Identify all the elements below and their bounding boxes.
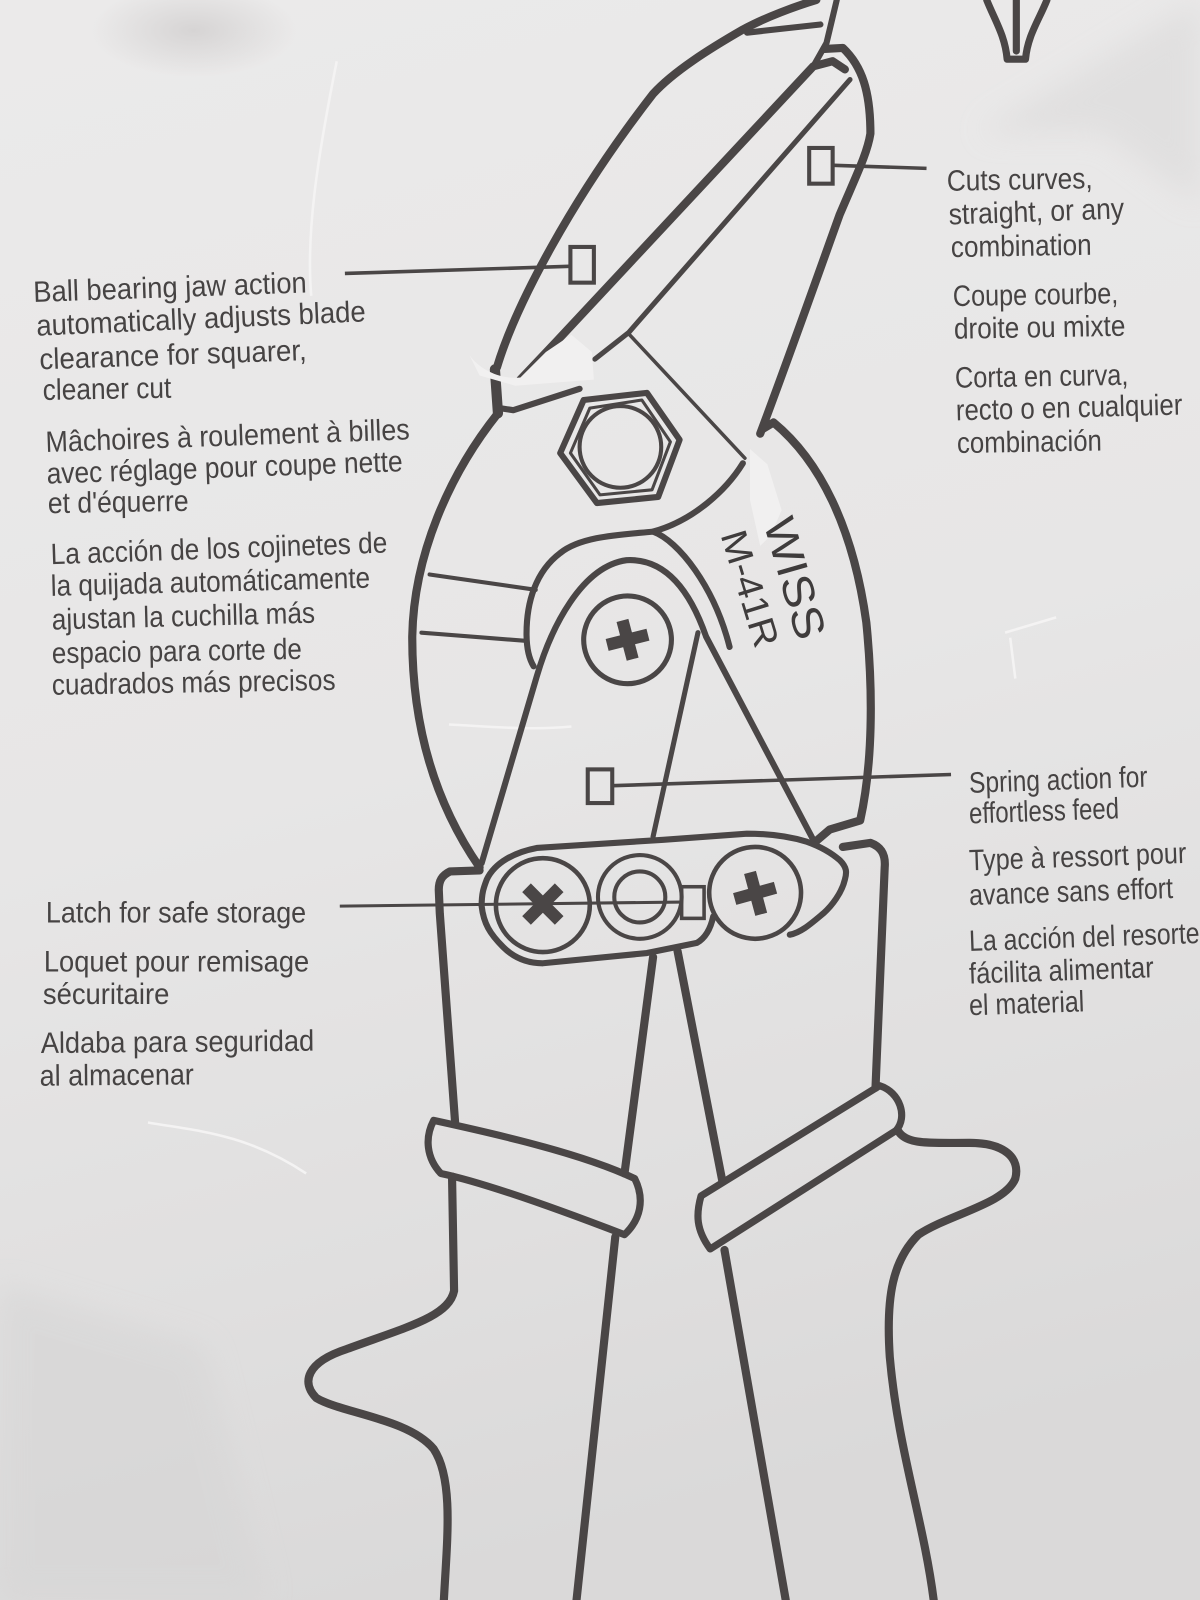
- head right outline: [763, 422, 871, 842]
- text block: English: automatically adjusts blade: [36, 295, 366, 343]
- head ribs: [421, 574, 536, 641]
- text block: Spanish: [955, 359, 1183, 460]
- right handle band: [698, 1086, 902, 1249]
- text block: French: [45, 413, 410, 520]
- inner right handle: [678, 951, 786, 1600]
- latch rivet: [598, 855, 682, 939]
- text block: English: [946, 162, 1125, 264]
- leader line and marker: [340, 887, 704, 918]
- pivot curve: [527, 463, 743, 666]
- left handle band: [428, 1120, 640, 1235]
- model label: [713, 512, 835, 652]
- text block: French: Mâchoires à roulement à billes: [45, 413, 410, 459]
- text block: Spanish: [50, 527, 388, 702]
- blade heel line: [629, 334, 745, 458]
- text block: Spanish: la quijada automáticamente: [50, 562, 370, 603]
- text block: English: [33, 267, 366, 407]
- text block: Spanish: [40, 1025, 314, 1093]
- latch plate: [482, 834, 846, 963]
- jaw heel: [500, 389, 580, 410]
- leader line and marker: [809, 148, 927, 184]
- text block: Spanish: el material: [968, 985, 1085, 1022]
- text block: Spanish: al almacenar: [40, 1058, 194, 1093]
- text block: French: [953, 277, 1126, 346]
- callout: cuts curves: [809, 148, 1183, 460]
- blade inner lines: [520, 61, 845, 380]
- head left outline: [412, 413, 498, 867]
- text block: English: Ball bearing jaw action: [33, 267, 307, 309]
- text block: Spanish: fácilita alimentar: [968, 951, 1154, 991]
- text block: English: combination: [951, 229, 1092, 264]
- callout: latch: [40, 887, 704, 1093]
- latch screw right: [709, 847, 801, 939]
- text block: Spanish: combinación: [957, 425, 1102, 460]
- upper jaw outer blade: [497, 0, 816, 367]
- text block: French: Loquet pour remisage: [44, 945, 309, 978]
- right handle grip: [889, 1131, 1016, 1600]
- text block: English: effortless feed: [968, 792, 1120, 830]
- text block: English: clearance for squarer,: [39, 334, 307, 376]
- text block: French: [43, 945, 309, 1011]
- model label: WISS: [754, 512, 835, 645]
- text block: Spanish: ajustan la cuchilla más: [51, 597, 315, 637]
- text block: French: droite ou mixte: [954, 310, 1126, 346]
- right handle upper: [843, 843, 885, 1088]
- leader line and marker: [345, 247, 594, 283]
- text block: French: Coupe courbe,: [953, 277, 1118, 313]
- callout: ball bearing jaw action: [33, 247, 594, 702]
- text block: French: sécuritaire: [43, 978, 169, 1011]
- latch screw left: [496, 858, 590, 952]
- text block: Spanish: cuadrados más precisos: [52, 664, 336, 702]
- text block: Spanish: [968, 917, 1200, 1022]
- lever inner line: [653, 633, 698, 837]
- leader line and marker: [588, 769, 951, 803]
- text block: Spanish: La acción de los cojinetes de: [50, 527, 388, 571]
- upper jaw tip connector: [747, 0, 837, 66]
- text block: English: Spring action for: [968, 761, 1148, 800]
- callout: spring action: [588, 761, 1200, 1022]
- top right ornament: [987, 0, 1047, 59]
- text block: French: et d'équerre: [48, 485, 189, 520]
- text block: Spanish: espacio para corte de: [52, 633, 302, 670]
- left handle lower: [308, 1177, 454, 1600]
- text block: Spanish: Corta en curva,: [955, 359, 1129, 395]
- text block: French: avec réglage pour coupe nette: [46, 445, 403, 491]
- text block: French: [968, 837, 1187, 912]
- text block: English: [968, 761, 1148, 830]
- torn paper crease: [469, 335, 782, 546]
- text block: English: straight, or any: [948, 192, 1125, 231]
- lever screw: [584, 596, 671, 684]
- lever arm: [482, 560, 813, 863]
- left handle upper: [439, 870, 480, 1122]
- text block: English: cleaner cut: [42, 372, 172, 407]
- text block: English: Cuts curves,: [946, 162, 1093, 198]
- model label: M-41R: [713, 525, 787, 652]
- inner left handle: [577, 957, 653, 1600]
- hex nut: [560, 393, 680, 503]
- second blade outer edge: [760, 48, 870, 434]
- text block: English: Latch for safe storage: [46, 896, 306, 929]
- tin snips illustration: [308, 0, 1047, 1600]
- text block: Spanish: Aldaba para seguridad: [41, 1025, 314, 1060]
